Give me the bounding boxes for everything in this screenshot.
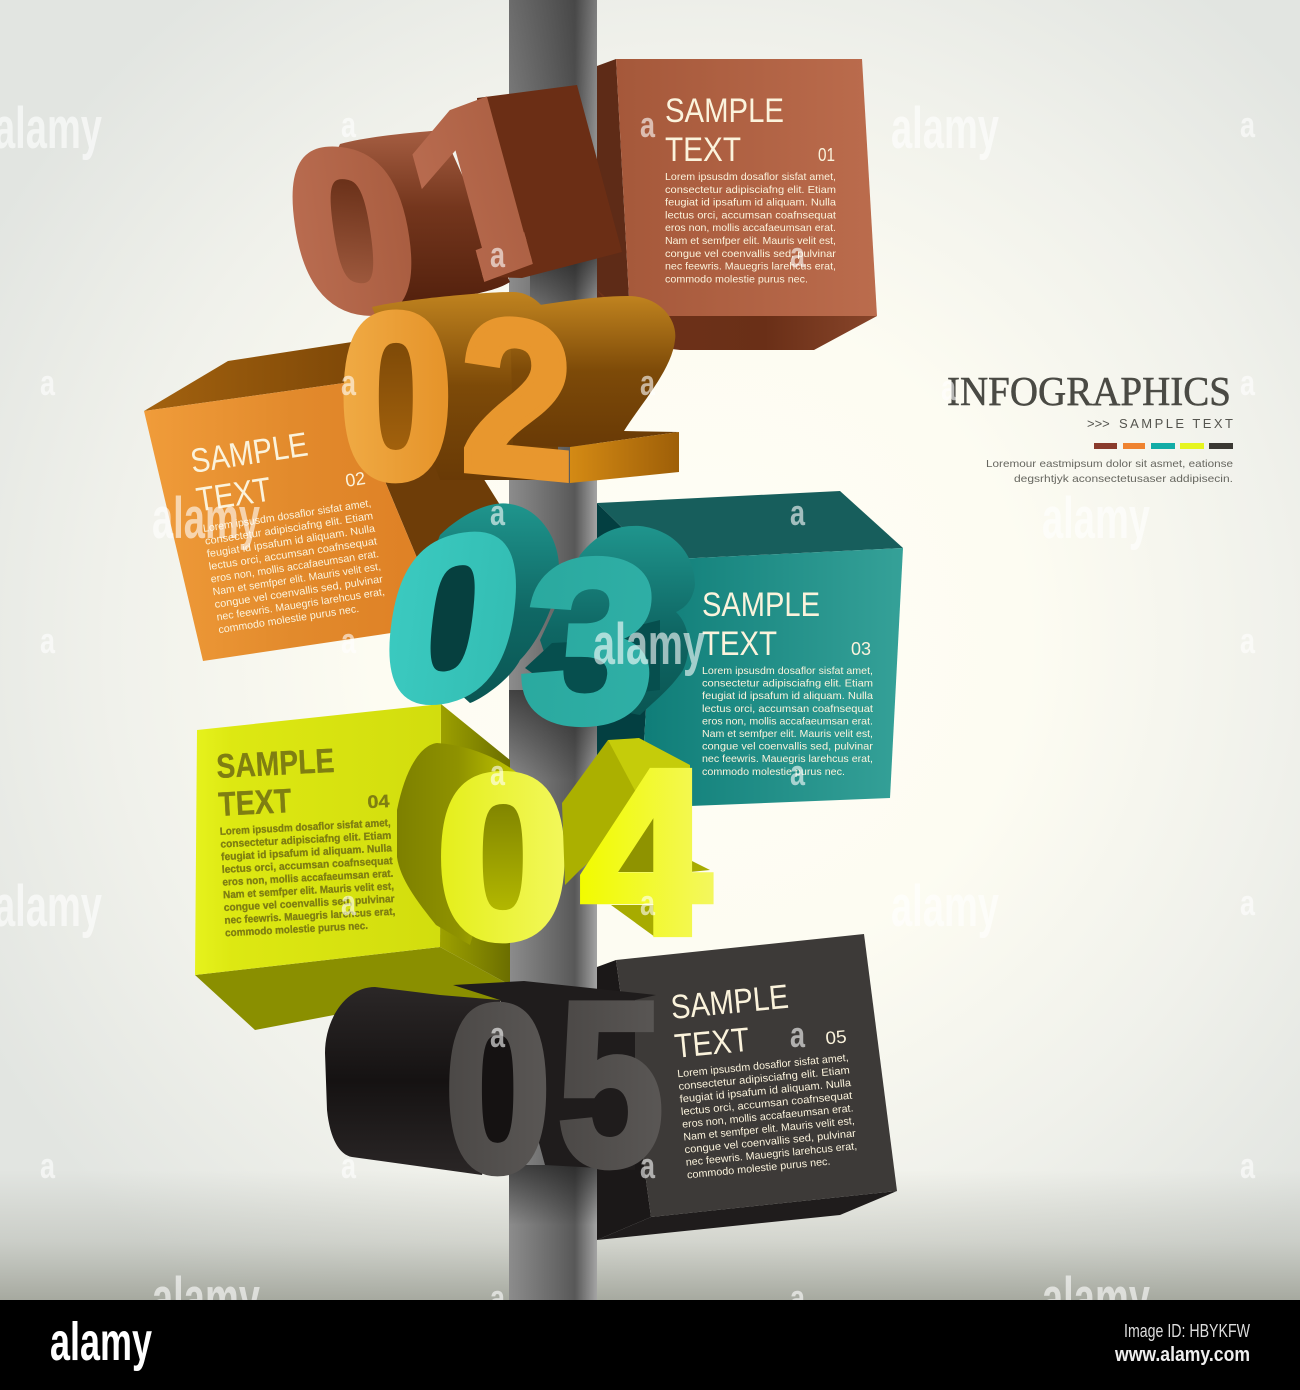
panel 1 text — [665, 92, 837, 285]
panel 2 text: Lorem ipsusdm dosaflor sisfat amet, — [202, 497, 372, 535]
watermarks: a — [640, 104, 656, 145]
panel 2 top side — [144, 340, 365, 411]
number 04 — [397, 721, 711, 987]
02 zero face: 0 — [339, 265, 453, 527]
panel 3 front — [640, 548, 903, 808]
panel 3 text: Nam et semfper elit. Mauris velit est, — [702, 728, 873, 740]
panel 1 text: lectus orci, accumsan coafnsequat — [665, 209, 836, 221]
central pole — [509, 0, 597, 1300]
watermarks: a — [40, 362, 56, 403]
watermarks: alamy — [1042, 1266, 1150, 1331]
image id: Image ID: HBYKFW — [1124, 1321, 1250, 1341]
panel 5 left side — [597, 960, 651, 1240]
website: www.alamy.com — [1114, 1344, 1250, 1366]
panel 5 text: consectetur adipisciafng elit. Etiam — [678, 1064, 851, 1093]
watermarks: a — [1240, 620, 1256, 661]
panel 2 right side — [344, 345, 500, 625]
panel 4 text: feugiat id ipsafum id aliquam. Nulla — [221, 842, 392, 863]
01 zero face: 0 — [272, 98, 433, 365]
panel 4 text: commodo molestie purus nec. — [225, 920, 368, 939]
watermarks: a — [490, 1014, 506, 1055]
02 two extrusion — [510, 296, 679, 447]
04 four face: 4 — [581, 721, 711, 983]
panel 2 text: Nam et semfper elit. Mauris velit est, — [212, 561, 382, 598]
panel 2 text: TEXT — [194, 471, 274, 519]
panel 1: brown box — [597, 59, 877, 350]
watermarks: a — [341, 882, 357, 923]
panel 3 text: congue vel coenvallis sed, pulvinar — [702, 741, 874, 753]
description — [986, 458, 1233, 485]
panel 1 text: nec feewris. Mauegris larehcus erat, — [665, 261, 836, 273]
panel 1 text: TEXT — [665, 131, 741, 169]
panel 5 text: TEXT — [673, 1021, 751, 1066]
panel 3 text — [702, 586, 874, 778]
panel 5 text: Nam et semfper elit. Mauris velit est, — [683, 1115, 855, 1143]
panel 4: yellow box — [195, 704, 510, 1030]
watermarks: a — [341, 1145, 357, 1186]
watermarks: a — [640, 1145, 656, 1186]
panel 5 text: congue vel coenvallis sed, pulvinar — [684, 1128, 857, 1156]
panel 3 left side — [597, 503, 655, 808]
footer bar — [0, 1300, 1300, 1390]
panel 4 right side — [440, 704, 510, 985]
03 three counter shadows — [525, 620, 660, 700]
01 zero extrusion — [300, 130, 510, 303]
watermarks: a — [341, 104, 357, 145]
04 zero face: 0 — [436, 728, 570, 987]
watermarks: a — [40, 620, 56, 661]
panel 3 text: commodo molestie purus nec. — [702, 766, 845, 778]
panel 2 text: lectus orci, accumsan coafnsequat — [208, 535, 378, 573]
header: infographics title block: SAMPLE TEXT — [1119, 416, 1233, 431]
panel 5 text: Lorem ipsusdm dosaflor sisfat amet, — [677, 1052, 849, 1080]
panel 5 text: commodo molestie purus nec. — [686, 1156, 831, 1181]
watermarks: a — [790, 1277, 806, 1318]
panel 5 text: feugiat id ipsafum id aliquam. Nulla — [679, 1077, 852, 1105]
watermarks: a — [1240, 882, 1256, 923]
watermarks: a — [1240, 362, 1256, 403]
05 five face: 5 — [558, 954, 663, 1213]
footer logo: alamy — [50, 1312, 152, 1372]
number 02 — [339, 265, 679, 527]
panel 3 text: TEXT — [702, 625, 777, 663]
panel 3 top side — [597, 491, 903, 560]
panel 2 text: 02 — [344, 468, 367, 491]
panel 5 text: SAMPLE — [669, 978, 790, 1027]
04 zero extrusion — [397, 743, 520, 945]
panel 3: teal box — [597, 491, 903, 808]
watermarks: a — [790, 492, 806, 533]
watermarks: a — [490, 492, 506, 533]
panel 4 text: lectus orci, accumsan coafnsequat — [222, 855, 393, 876]
watermarks: a — [790, 752, 806, 793]
panel 1 text: Nam et semfper elit. Mauris velit est, — [665, 235, 836, 247]
panel 5 text: lectus orci, accumsan coafnsequat — [680, 1090, 853, 1118]
panel 4 text: consectetur adipisciafng elit. Etiam — [220, 830, 392, 851]
panel 3 text: Lorem ipsusdm dosaflor sisfat amet, — [702, 665, 873, 677]
panel 5 front — [616, 934, 897, 1217]
description: Loremour eastmipsum dolor sit asmet, eationse — [986, 458, 1233, 470]
panel 1 text: 01 — [818, 145, 835, 165]
panel 1 text: eros non, mollis accafaeumsan erat. — [665, 222, 836, 234]
watermarks: alamy — [593, 612, 705, 677]
header: infographics title block — [947, 368, 1233, 485]
title: INFOGRAPHICS — [947, 368, 1231, 414]
watermarks: alamy — [891, 874, 999, 939]
panel 3 text: 03 — [851, 639, 871, 659]
03 three extrusion — [540, 526, 695, 715]
panel 2 text: consectetur adipisciafng elit. Etiam — [204, 510, 374, 548]
05 five extrusion — [453, 981, 656, 1170]
panel 4 text: congue vel coenvallis sed, pulvinar — [224, 893, 395, 914]
panel 2 text: SAMPLE — [188, 425, 310, 481]
panel 1 text: SAMPLE — [665, 92, 784, 130]
panel 2: orange box — [144, 340, 500, 661]
watermarks: a — [790, 234, 806, 275]
03 zero extrusion — [400, 503, 559, 703]
watermarks: a — [941, 367, 957, 408]
05 zero face: 0 — [445, 959, 551, 1221]
watermarks: alamy — [1042, 486, 1150, 551]
panel 3 text: lectus orci, accumsan coafnsequat — [702, 703, 873, 715]
watermarks: alamy — [152, 486, 260, 551]
panel 2 text: congue vel coenvallis sed, pulvinar — [214, 573, 384, 611]
panel 5 bottom side — [597, 1191, 897, 1240]
watermarks: a — [640, 882, 656, 923]
01 one extrusion — [477, 85, 622, 278]
subtitle: >>> — [1087, 416, 1110, 431]
panel 4 text — [215, 739, 397, 939]
watermarks: a — [341, 620, 357, 661]
02 base side — [570, 432, 679, 483]
watermarks: a — [490, 752, 506, 793]
panel 5 text: eros non, mollis accafaeumsan erat. — [682, 1102, 854, 1131]
panel 3 text: feugiat id ipsafum id aliquam. Nulla — [702, 690, 873, 702]
number 05 — [325, 954, 663, 1221]
01 one face: 1 — [380, 35, 586, 344]
panel 4 text: 04 — [367, 791, 390, 812]
number 03 — [370, 479, 695, 769]
watermarks: alamy — [891, 96, 999, 161]
panel 4 text: eros non, mollis accafaeumsan erat. — [222, 868, 394, 889]
03 three face: 3 — [512, 512, 668, 769]
panel 2 text: commodo molestie purus nec. — [218, 603, 360, 636]
watermarks: a — [790, 1014, 806, 1055]
panel 2 front — [144, 383, 445, 661]
panel 2 text: feugiat id ipsafum id aliquam. Nulla — [206, 523, 376, 560]
panel 1 left side — [597, 59, 630, 316]
panel 4 text: TEXT — [217, 782, 292, 824]
watermarks: a — [490, 1277, 506, 1318]
panel 4 front — [195, 704, 441, 975]
panel 2 text: eros non, mollis accafaeumsan erat. — [210, 548, 380, 586]
panel 2 text: nec feewris. Mauegris larehcus erat, — [216, 586, 386, 624]
panel 1 bottom side — [597, 290, 877, 350]
number 01 — [292, 85, 622, 316]
04 four extrusion — [562, 738, 710, 937]
panel 1 text: commodo molestie purus nec. — [665, 273, 808, 285]
panel 4 text: Nam et semfper elit. Mauris velit est, — [223, 880, 394, 901]
panel 5 text: 05 — [825, 1026, 847, 1048]
panel 5 text — [669, 973, 859, 1181]
panel 3 text: consectetur adipisciafng elit. Etiam — [702, 678, 873, 690]
panel 4 text: SAMPLE — [215, 742, 335, 786]
watermarks: a — [1240, 1145, 1256, 1186]
panel 4 text: Lorem ipsusdm dosaflor sisfat amet, — [220, 817, 391, 838]
panel 3 text: eros non, mollis accafaeumsan erat. — [702, 715, 873, 727]
05 zero extrusion — [325, 987, 500, 1175]
panel 5: dark box — [597, 934, 897, 1240]
colour key bars — [1094, 443, 1233, 449]
watermarks: a — [490, 234, 506, 275]
description: degsrhtjyk aconsectetusaser addipisecin. — [1014, 473, 1233, 485]
panel 4 text: nec feewris. Mauegris larehcus erat, — [224, 906, 396, 927]
watermarks: a — [1240, 104, 1256, 145]
panel 1 text: feugiat id ipsafum id aliquam. Nulla — [665, 197, 836, 209]
02 two face: 2 — [460, 270, 573, 526]
03 zero face: 0 — [370, 479, 536, 757]
panel 1 front — [616, 59, 877, 316]
panel 2 text — [188, 417, 388, 636]
watermarks: a — [341, 362, 357, 403]
panel 1 text: congue vel coenvallis sed, pulvinar — [665, 248, 837, 260]
watermarks: a — [640, 362, 656, 403]
watermarks: a — [40, 1145, 56, 1186]
watermarks: alamy — [152, 1266, 260, 1331]
02 zero extrusion — [372, 292, 560, 480]
panel 1 text: Lorem ipsusdm dosaflor sisfat amet, — [665, 171, 836, 183]
panel 3 text: SAMPLE — [702, 586, 820, 624]
panel 5 text: nec feewris. Mauegris larehcus erat, — [685, 1140, 858, 1169]
panel 3 text: nec feewris. Mauegris larehcus erat, — [702, 753, 873, 765]
panel 4 bottom side — [195, 947, 510, 1030]
panel 1 text: consectetur adipisciafng elit. Etiam — [665, 184, 836, 196]
